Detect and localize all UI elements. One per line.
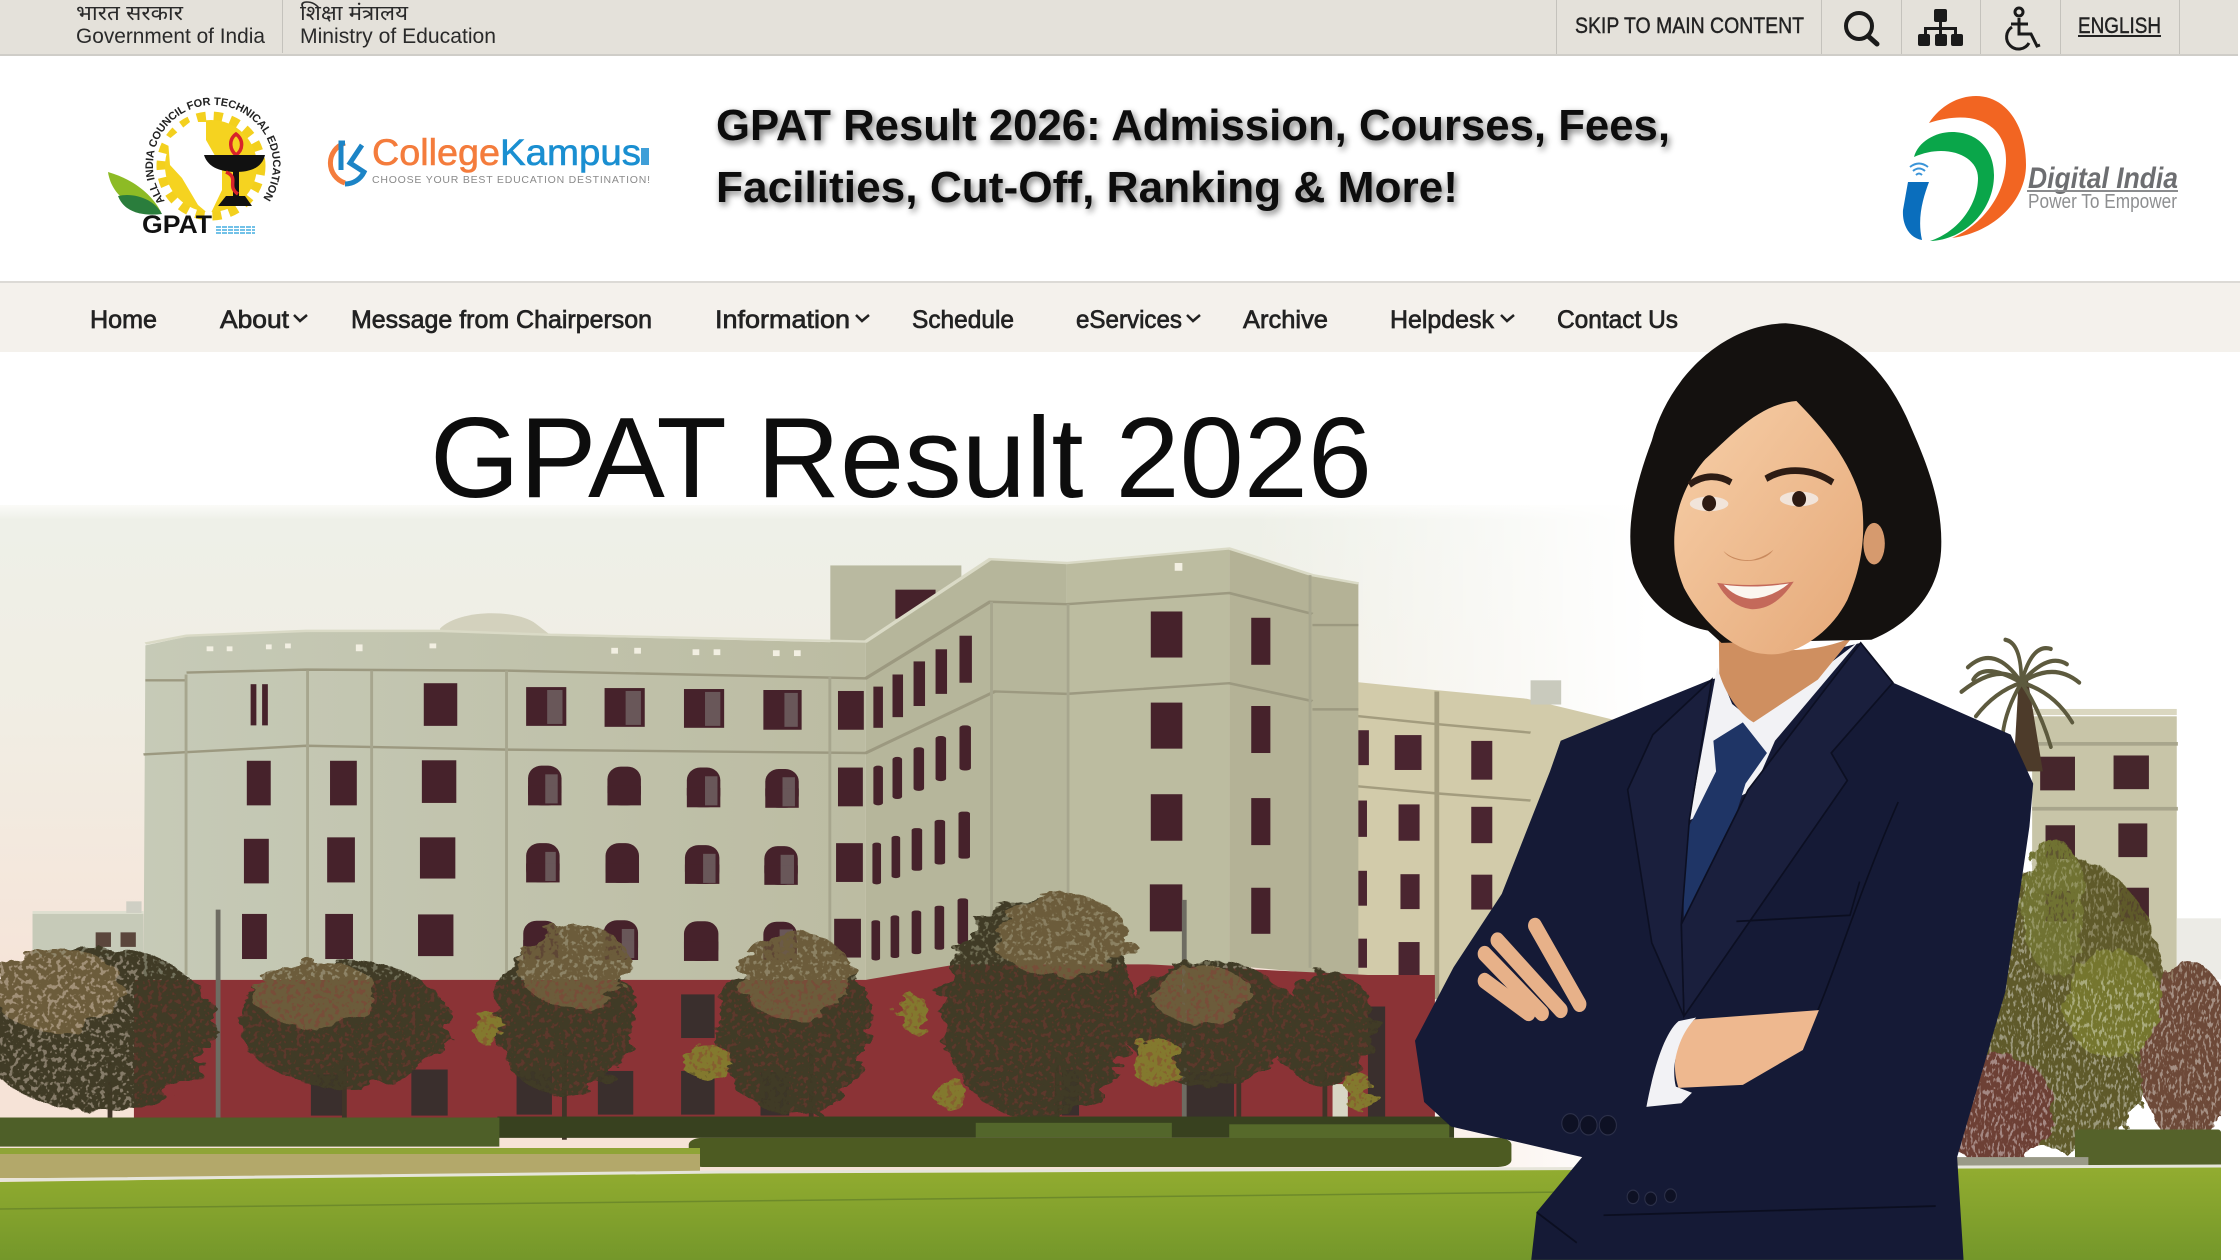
- right rear wing: [1354, 680, 1617, 999]
- far left annex: [33, 901, 143, 957]
- icon: sitemap: [1918, 9, 1963, 46]
- light poles and tree trunks: [110, 900, 1325, 1140]
- sleeve buttons: [1562, 1114, 1676, 1205]
- crossed hand: [1485, 926, 1579, 1013]
- headline: Facilities, Cut-Off, Ranking & More!: [716, 163, 1458, 212]
- sky: [0, 506, 1570, 1182]
- brick ground floor: [134, 964, 1435, 1125]
- navigation bar: Archive: [1243, 306, 1328, 334]
- tie: [1683, 722, 1767, 918]
- hedges: [0, 1117, 1511, 1167]
- forearm: [1675, 1010, 1819, 1088]
- lapels: [1628, 643, 1893, 1016]
- navigation bar: Contact Us: [1557, 306, 1678, 334]
- government of india label: भारत सरकार: [76, 2, 183, 25]
- pilaster shadows: [185, 575, 1311, 977]
- shirt cuff: [1646, 1017, 1696, 1107]
- logo: CollegeKampus: CHOOSE YOUR BEST EDUCATION DESTINATION!: [372, 174, 650, 186]
- hero title: GPAT Result 2026: [430, 395, 1372, 522]
- logo: CollegeKampus: College: [372, 132, 500, 173]
- icon: search: [1846, 13, 1877, 44]
- navigation bar: About: [220, 306, 289, 334]
- logo: CollegeKampus: Kampus: [500, 132, 641, 173]
- tower front: [1067, 548, 1229, 965]
- parapet vents: [207, 563, 1182, 656]
- logo: CollegeKampus: [330, 132, 650, 186]
- logo: Digital India: Digital India: [2028, 162, 2178, 195]
- navigation bar: Message from Chairperson: [351, 306, 652, 334]
- navigation bar: eServices: [1076, 306, 1182, 334]
- trees on the right of the portrait: [1957, 638, 2221, 1166]
- shirt collar: [1689, 642, 1859, 820]
- top government bar: [0, 0, 2238, 56]
- government of india label: [76, 2, 265, 48]
- navigation bar: Helpdesk: [1390, 306, 1494, 334]
- hero photo: campus building: [0, 505, 2236, 1260]
- rooftop block: [830, 565, 961, 643]
- window reflections: [545, 690, 798, 959]
- icon: wifi signal: [1910, 164, 1928, 175]
- logo: GPAT AICTE emblem: GPAT: [142, 211, 212, 239]
- icon: wheelchair accessibility: [2007, 8, 2040, 49]
- palm tree: [1961, 640, 2079, 771]
- header band: [108, 96, 2178, 241]
- ministry of education label: [300, 1, 496, 48]
- hair: [1630, 323, 1941, 643]
- tower windows: [1151, 611, 1182, 658]
- jacket pocket and seams: [1537, 802, 1936, 1243]
- front facade: [143, 631, 866, 980]
- language selector: ENGLISH: [2078, 13, 2161, 38]
- tower side: [1229, 548, 1358, 977]
- dome: [440, 613, 550, 635]
- headline: GPAT Result 2026: Admission, Courses, Fees,: [716, 101, 1670, 150]
- jacket: [1415, 643, 2033, 1260]
- trees: [0, 895, 1375, 1120]
- logo: GPAT AICTE emblem: ALL INDIA COUNCIL FOR TECHNICAL EDUCATION: [145, 97, 281, 203]
- logo: GPAT AICTE emblem: [108, 97, 281, 239]
- right hedge: [1946, 1130, 2221, 1167]
- headline: [716, 101, 1670, 212]
- navigation bar: Schedule: [912, 306, 1014, 334]
- main building: [0, 548, 1617, 1167]
- navigation bar: Information: [715, 306, 850, 334]
- government of india label: Government of India: [76, 25, 265, 48]
- windows: [242, 611, 1270, 961]
- lawn: [0, 1148, 2221, 1260]
- portrait: student in navy suit: [1415, 323, 2033, 1260]
- skip to main content link: SKIP TO MAIN CONTENT: [1575, 13, 1804, 38]
- right wing building: [2032, 709, 2221, 980]
- face: [1674, 401, 1885, 654]
- side facade: [866, 559, 1067, 980]
- ministry of education label: शिक्षा मंत्रालय: [300, 1, 409, 25]
- logo: Digital India: [1903, 96, 2178, 241]
- cornices: [143, 593, 1358, 754]
- navigation bar: Home: [90, 306, 157, 334]
- side facade windows: [873, 687, 883, 728]
- neck: [1719, 624, 1853, 722]
- logo: Digital India: Power To Empower: [2028, 191, 2177, 213]
- ministry of education label: Ministry of Education: [300, 25, 496, 48]
- navigation bar: [0, 281, 2240, 352]
